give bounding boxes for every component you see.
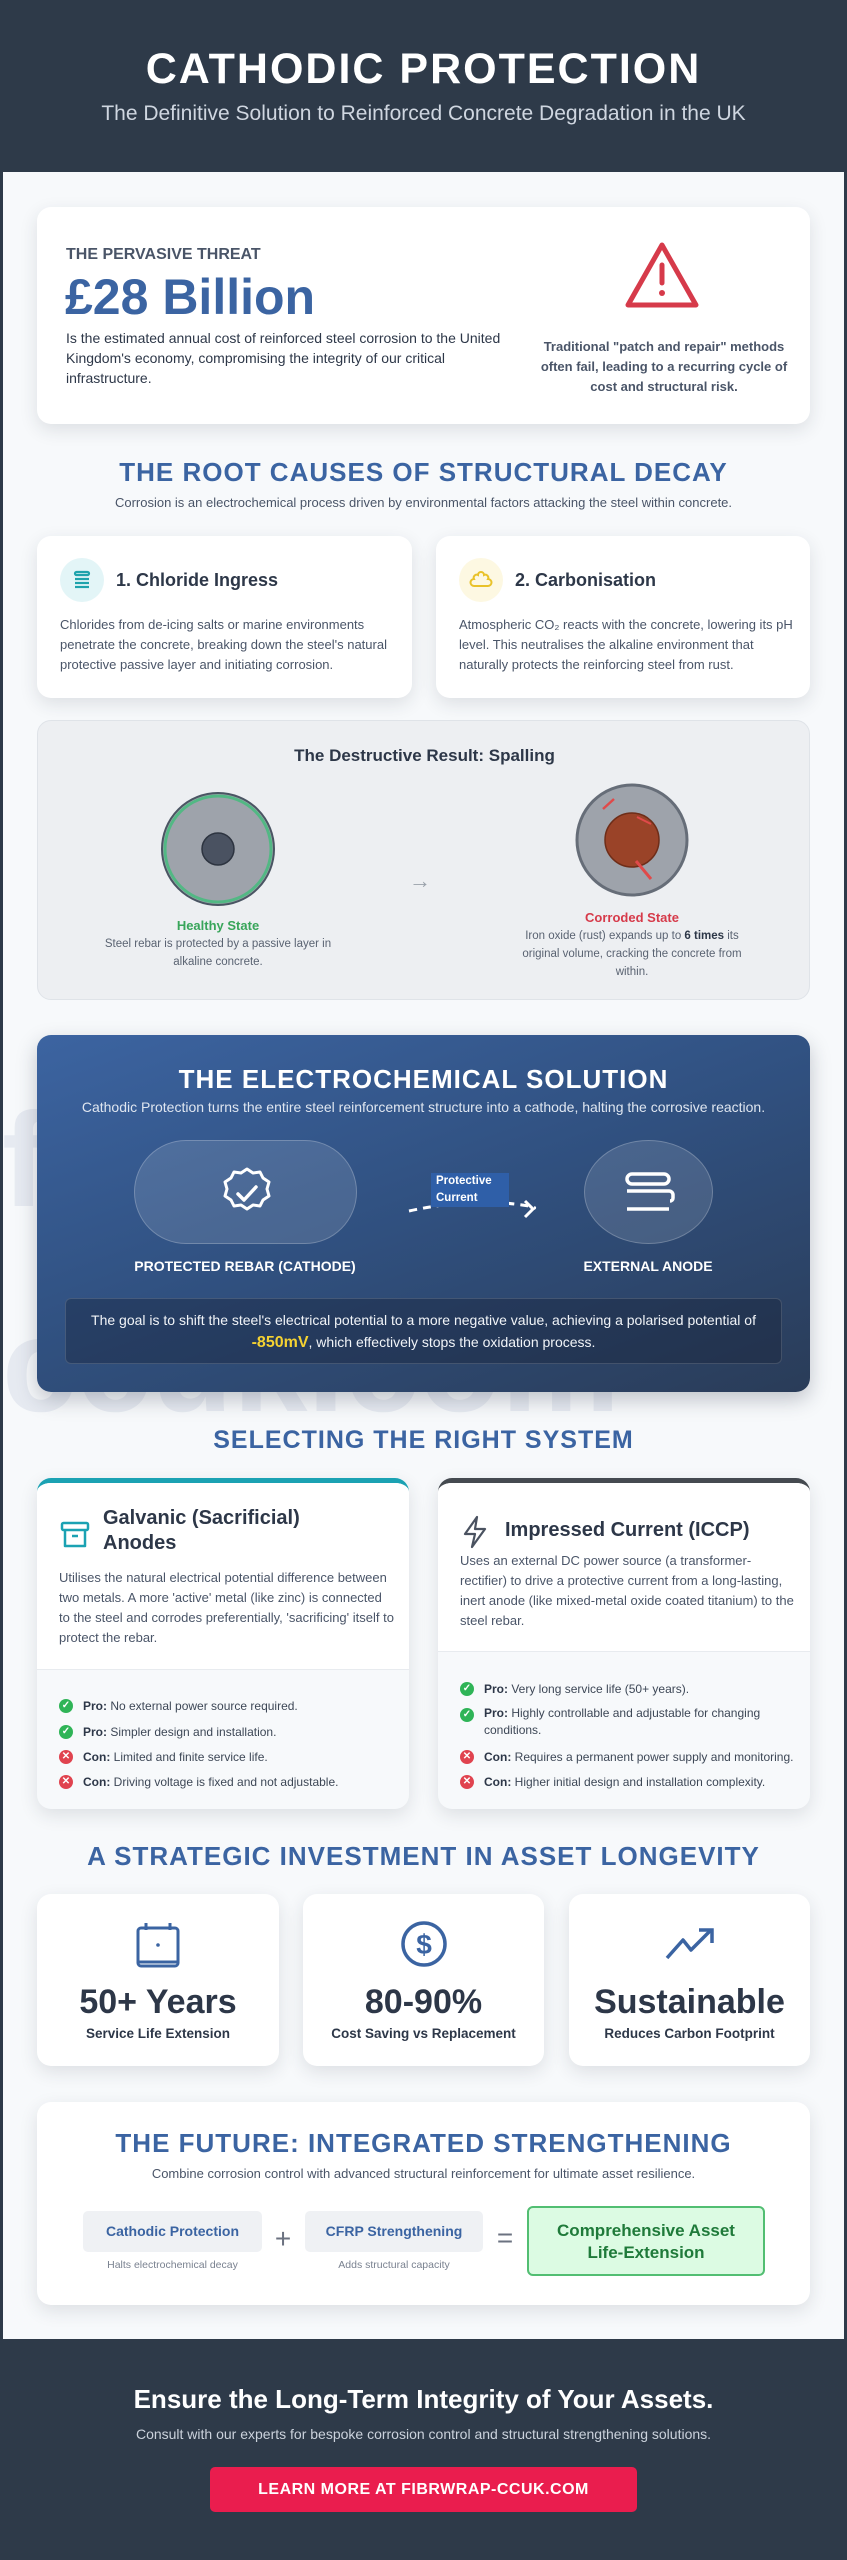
list: galvanic pros/cons: Pro: No external power source required. [83,1699,298,1713]
list: galvanic pros/cons [59,1699,338,1789]
arrow: → [409,868,431,893]
caption: cfrp: Adds structural capacity [338,2259,450,2271]
caption: cathodic: Halts electrochemical decay [107,2259,238,2271]
box: result: Comprehensive Asset [557,2221,735,2240]
title: CATHODIC PROTECTION [146,45,701,93]
label: healthy: Healthy State [177,918,259,933]
label: protective current [431,1173,509,1207]
number: years: 50+ Years [79,1983,237,2021]
box: cfrp: CFRP Strengthening [326,2223,462,2239]
text: iccp: Uses an external DC power source (a transformer-rectifier) to drive a protective current from a long-lasting, inert anode (like mixed-metal oxide coated titanium) to the steel rebar. [460,1553,794,1628]
label: healthy: Steel rebar is protected by a passive layer in alkaline concrete. [105,938,331,968]
label: years: Service Life Extension [86,2026,230,2041]
heading: selecting: SELECTING THE RIGHT SYSTEM [213,1426,634,1454]
icon: calendar [136,1923,180,1968]
icon: warning [626,242,698,308]
footer text: Consult with our experts for bespoke corrosion control and structural strengthening solutions. [136,2426,711,2442]
label: protective current: Current [436,1192,478,1204]
label: corroded: Iron oxide (rust) expands up to 6 times its original volume, cracking the concrete from within. [522,930,742,978]
label: anode: EXTERNAL ANODE [583,1258,713,1274]
label: saving: Cost Saving vs Replacement [331,2026,516,2041]
label: corroded: Corroded State [585,910,679,925]
subtitle: The Definitive Solution to Reinforced Concrete Degradation in the UK [101,102,746,125]
stat: saving [303,1894,544,2066]
panel: solution [37,1035,810,1392]
title: chloride: 1. Chloride Ingress [116,570,278,590]
side borders [0,0,3,2560]
list: galvanic pros/cons: ✕ [62,1751,70,1762]
button: cta [210,2467,637,2512]
icon: dollar: $ [416,1929,432,1960]
title: carbonisation: 2. Carbonisation [515,570,656,590]
list: galvanic pros/cons: Pro: Simpler design and installation. [83,1725,276,1739]
title: future: THE FUTURE: INTEGRATED STRENGTHENING [115,2128,732,2158]
watermark: fibrwrap- [2,1086,575,1235]
watermark: ccuk.com [2,1291,620,1440]
panel: chloride [37,536,412,698]
callout: goal: The goal is to shift the steel's electrical potential to a more negative value, achieving a polarised potential of -850mV, which effectively stops the oxidation process. [91,1312,756,1351]
node: anode [584,1140,713,1244]
list: iccp pros/cons: Con: Requires a permanent power supply and monitoring. [484,1750,794,1764]
panel: iccp [438,1478,810,1809]
text: chloride: Chlorides from de-icing salts or marine environments penetrate the concrete, breaking down the steel's natural protective passive layer and initiating corrosion. [60,617,387,672]
label: healthy [105,918,331,968]
stat: sustainable [569,1894,810,2066]
stat: years [37,1894,279,2066]
list: galvanic pros/cons: ✕ [62,1776,70,1787]
callout: goal [65,1298,782,1364]
equals: = [497,2222,513,2253]
title: iccp: Impressed Current (ICCP) [505,1519,750,1541]
label: rebar: PROTECTED REBAR (CATHODE) [134,1258,356,1274]
footer [0,2339,847,2560]
footer title: Ensure the Long-Term Integrity of Your Assets. [134,2384,713,2414]
threat label: THE PERVASIVE THREAT [66,246,261,263]
big number: £28 Billion [65,269,315,325]
panel: carbonisation [436,536,810,698]
diagram: corroded [576,784,688,896]
box: cathodic: Cathodic Protection [106,2223,239,2239]
box: result: Life-Extension [587,2243,705,2262]
list: galvanic pros/cons: ✓ [62,1726,70,1737]
heading: root causes: THE ROOT CAUSES OF STRUCTURAL DECAY [119,457,728,487]
label: protective current: Protective [436,1175,492,1187]
threat text: Is the estimated annual cost of reinforced steel corrosion to the United Kingdom's economy, compromising the integrity of our critical infrastructure. [66,330,500,386]
number: sustainable: Sustainable [594,1983,785,2021]
subheading: root causes: Corrosion is an electrochemical process driven by environmental factors attacking the steel within concrete. [115,495,732,510]
title: spalling: The Destructive Result: Spalling [294,746,555,765]
list: iccp pros/cons: ✕ [463,1751,471,1762]
box: result [527,2206,765,2276]
list: iccp pros/cons: Con: Higher initial design and installation complexity. [484,1775,765,1789]
panel: galvanic [37,1478,409,1809]
threat side text: Traditional "patch and repair" methods often fail, leading to a recurring cycle of cost and structural risk. [541,339,787,394]
title: solution: THE ELECTROCHEMICAL SOLUTION [179,1064,668,1094]
box: cfrp [305,2211,483,2252]
list: iccp pros/cons: Pro: Very long service life (50+ years). [484,1682,689,1696]
plus: + [275,2223,291,2254]
panel: spalling [37,720,810,1000]
label: sustainable: Reduces Carbon Footprint [604,2026,775,2041]
diagram: healthy [161,792,275,906]
list: iccp pros/cons: ✓ [463,1683,471,1694]
icon: archive [60,1522,90,1548]
icon: dollar [401,1921,447,1967]
heading: strategic: A STRATEGIC INVESTMENT IN ASSET LONGEVITY [87,1841,760,1871]
icon: carbonisation [459,558,503,602]
title: galvanic: Galvanic (Sacrificial) Anodes [103,1507,300,1554]
list: galvanic pros/cons: Con: Limited and finite service life. [83,1750,268,1764]
panel: future [37,2102,810,2305]
list: iccp pros/cons [460,1682,794,1789]
icon: chloride [60,558,104,602]
watermark [2,1086,620,1440]
arrow: protective current [408,1200,536,1218]
list: iccp pros/cons: Pro: Highly controllable and adjustable for changing conditions. [484,1706,760,1737]
number: saving: 80-90% [365,1983,482,2021]
subtitle: solution: Cathodic Protection turns the entire steel reinforcement structure into a cathode, halting the corrosive reaction. [82,1099,765,1115]
node: rebar [134,1140,357,1244]
box: cathodic [83,2211,262,2252]
icon: trend [666,1928,714,1960]
panel: threat [37,207,810,424]
list: iccp pros/cons: ✓ [463,1709,471,1720]
text: galvanic: Utilises the natural electrical potential difference between two metals. A more 'active' metal (like zinc) is connected to the steel and corrodes preferentially, 'sacrificing' itself to protect the rebar. [59,1570,394,1645]
text: carbonisation: Atmospheric CO₂ reacts with the concrete, lowering its pH level. This neutralises the alkaline environment that naturally protects the reinforcing steel from rust. [459,617,793,672]
header [0,0,847,172]
list: galvanic pros/cons: ✓ [62,1700,70,1711]
list: iccp pros/cons: ✕ [463,1776,471,1787]
subtitle: future: Combine corrosion control with advanced structural reinforcement for ultimate asset resilience. [152,2166,695,2181]
list: galvanic pros/cons: Con: Driving voltage is fixed and not adjustable. [83,1775,338,1789]
button: cta: LEARN MORE AT FIBRWRAP-CCUK.COM [258,2481,589,2498]
icon: bolt [464,1516,486,1548]
